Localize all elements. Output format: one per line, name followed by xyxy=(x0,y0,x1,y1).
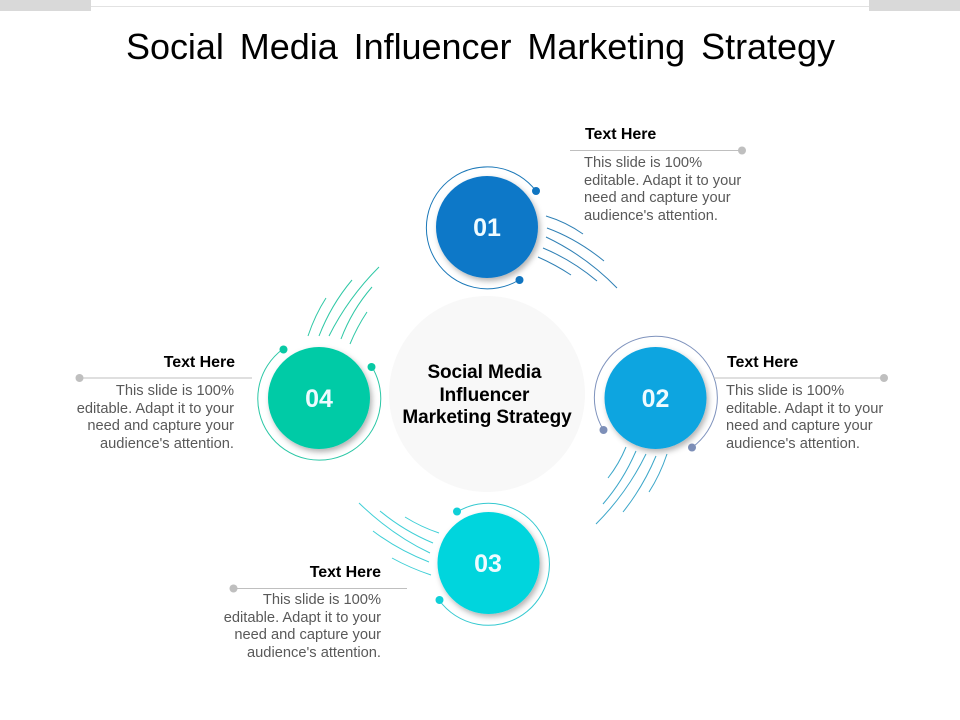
dots 02 xyxy=(600,426,696,452)
text block 04: Text Here xyxy=(164,354,235,371)
panel: step 01 xyxy=(426,126,746,289)
panel: central circle xyxy=(389,296,585,492)
text block 03: need and capture your xyxy=(234,627,381,643)
text block 03: editable. Adapt it to your xyxy=(224,610,381,626)
text block 04: audience's attention. xyxy=(100,436,234,452)
central label: Influencer xyxy=(440,385,530,406)
number circle 03: 03 xyxy=(474,550,502,578)
ring 02 xyxy=(594,336,717,448)
text block 03: This slide is 100% xyxy=(263,592,381,608)
panel: step 02 xyxy=(594,336,888,524)
icon: streak lines 01 xyxy=(538,216,617,288)
text block 02 xyxy=(714,354,888,452)
number circle 03 xyxy=(438,512,540,614)
number circle 02 xyxy=(604,347,706,449)
text block 03 xyxy=(224,564,407,661)
dots 03 xyxy=(436,508,461,604)
icon: streak lines 04 xyxy=(308,267,379,344)
dots 01 xyxy=(516,187,540,284)
ring 01 xyxy=(426,167,536,289)
text block 01 xyxy=(570,126,746,224)
text block 03: Text Here xyxy=(310,564,381,581)
text block 01: Text Here xyxy=(585,126,656,143)
text block 02: audience's attention. xyxy=(726,436,860,452)
number circle 01: 01 xyxy=(473,214,501,242)
central label: Social Media xyxy=(427,362,542,383)
text block 02: editable. Adapt it to your xyxy=(726,401,883,417)
text block 02: This slide is 100% xyxy=(726,383,844,399)
text block 04: This slide is 100% xyxy=(116,383,234,399)
text block 04: need and capture your xyxy=(87,418,234,434)
icon: streak lines 03 xyxy=(359,503,439,575)
panel: step 03 xyxy=(224,503,549,661)
text block 01: This slide is 100% xyxy=(584,155,702,171)
text block 01: editable. Adapt it to your xyxy=(584,173,741,189)
panel: step 04 xyxy=(76,267,381,460)
text block 04 xyxy=(76,354,252,452)
text block 03: audience's attention. xyxy=(247,645,381,661)
number circle 04: 04 xyxy=(305,385,333,413)
text block 02: Text Here xyxy=(727,354,798,371)
text block 04: editable. Adapt it to your xyxy=(77,401,234,417)
text block 02: need and capture your xyxy=(726,418,873,434)
number circle 01 xyxy=(436,176,538,278)
ring 04 xyxy=(258,349,381,460)
number circle 02: 02 xyxy=(642,385,669,413)
number circle 04 xyxy=(268,347,370,449)
text block 01: audience's attention. xyxy=(584,208,718,224)
text block 01: need and capture your xyxy=(584,190,731,206)
title: Social Media Influencer Marketing Strategy xyxy=(126,26,835,67)
icon: streak lines 02 xyxy=(596,447,667,524)
dots 04 xyxy=(280,346,376,371)
ring 03 xyxy=(439,503,549,625)
central label: Marketing Strategy xyxy=(402,407,572,428)
